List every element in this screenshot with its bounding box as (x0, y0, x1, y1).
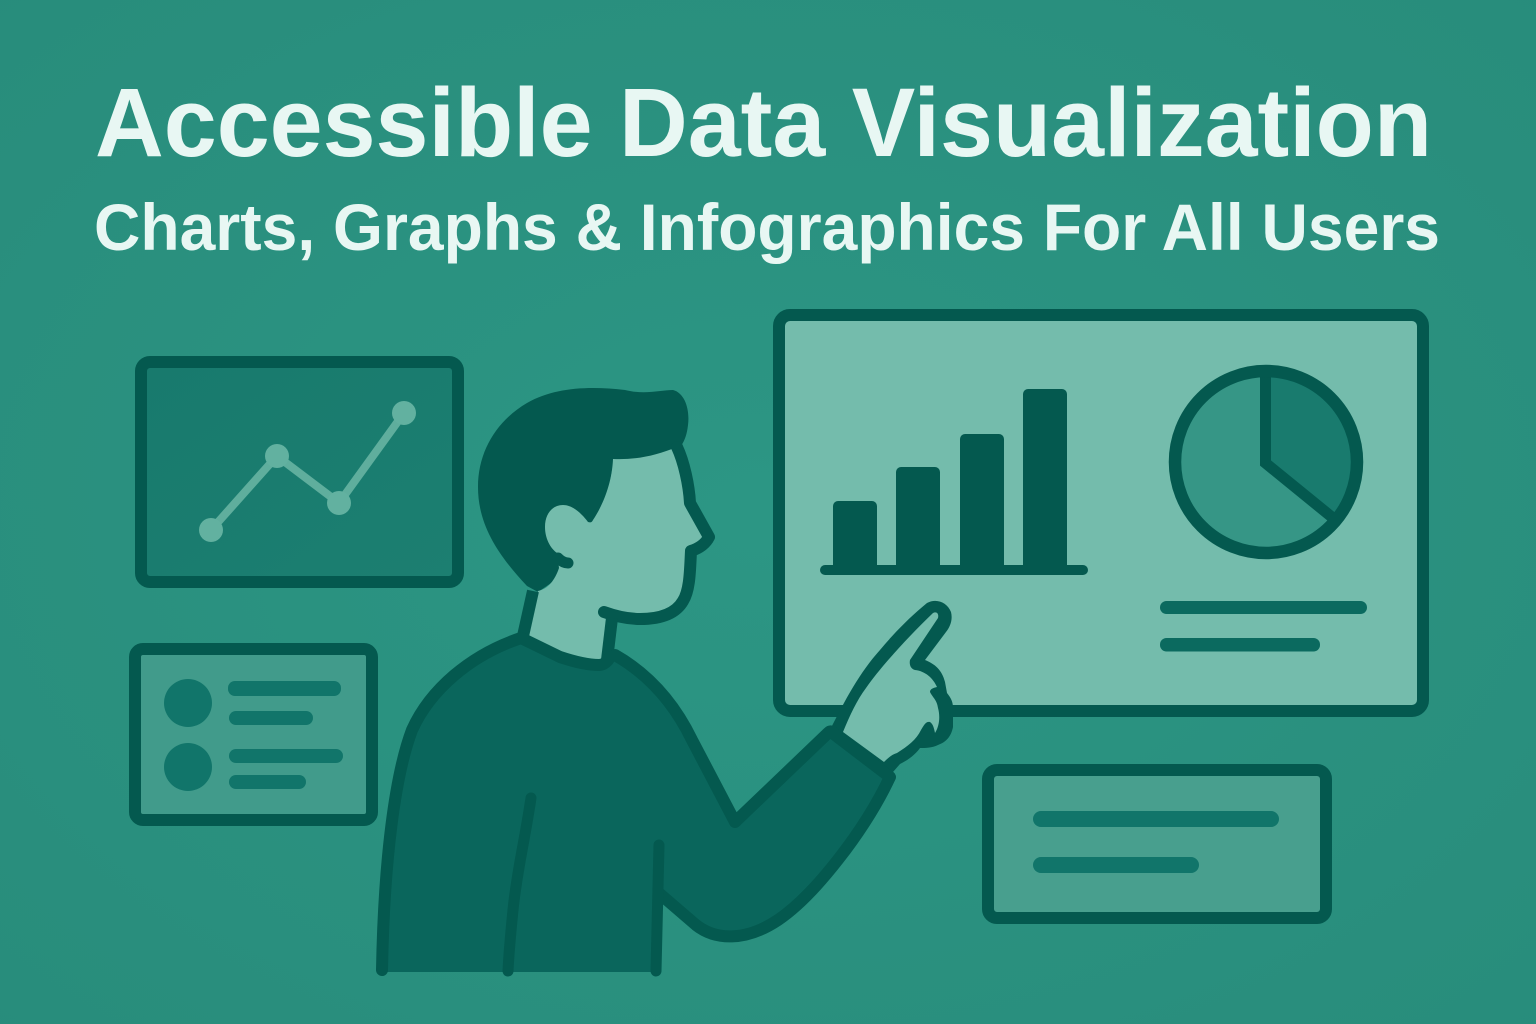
list row one (164, 679, 341, 727)
bar chart (820, 389, 1088, 575)
sweater fold left (508, 798, 531, 971)
subtitle: Charts, Graphs & Infographics For All Users (94, 190, 1440, 264)
panel: main dashboard screen (779, 315, 1423, 711)
person pointing (382, 388, 953, 972)
hair (478, 388, 688, 592)
panel: note card (988, 770, 1326, 918)
list row two (164, 743, 343, 791)
hand outline (830, 601, 953, 780)
face profile outline (604, 447, 709, 619)
pointing hand (843, 612, 939, 762)
face and neck (523, 447, 709, 662)
note lines (1033, 811, 1279, 873)
panel: list card (135, 649, 372, 820)
line chart series (199, 401, 416, 542)
sweater fold right (656, 845, 659, 971)
title: Accessible Data Visualization (95, 68, 1432, 177)
neck front line (607, 618, 612, 660)
text lines (1160, 601, 1367, 652)
panel: line chart (141, 362, 458, 582)
pie chart (1175, 371, 1357, 553)
sweater body fill (382, 638, 890, 972)
neck back line (523, 591, 533, 636)
ear lobe (558, 558, 568, 563)
sweater outline (382, 638, 890, 970)
